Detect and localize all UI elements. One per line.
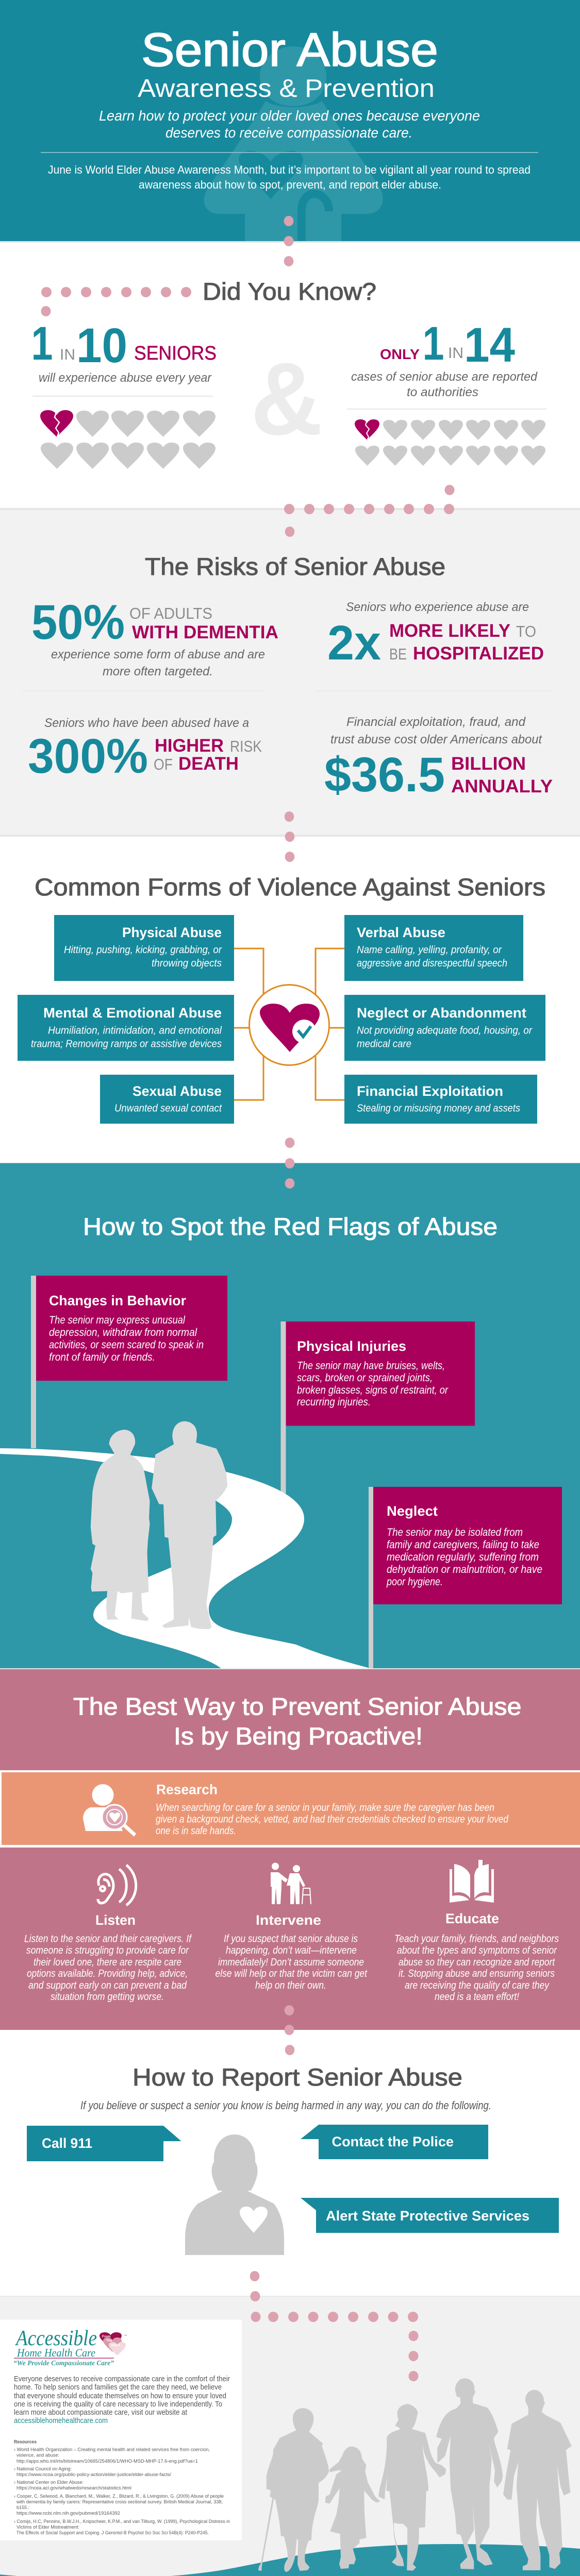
mother xyxy=(378,2404,446,2571)
closing paragraph: home. To help seniors and families get the care they need, we believe xyxy=(14,2383,222,2392)
flag: changes in behavior: The senior may express unusual xyxy=(49,1314,186,1326)
logo: accessible home health care: Home Health Care xyxy=(16,2346,95,2359)
box: mental and emotional abuse: trauma; Removing ramps or assistive devices xyxy=(31,1039,222,1050)
panel: common forms of violence xyxy=(0,835,580,1163)
logo hearts: Heart xyxy=(111,2344,120,2347)
flag: physical injuries: The senior may have bruises, welts, xyxy=(297,1360,445,1371)
stat: only 1 in 14: 1 xyxy=(423,317,444,370)
awareness month text: June is World Elder Abuse Awareness Month, but it’s important to be vigilant all year round to spread xyxy=(48,163,531,176)
column: intervene: If you suspect that senior abuse is xyxy=(224,1933,358,1944)
column: intervene: immediately! Don’t assume someone xyxy=(218,1957,364,1968)
stat: 300 percent: HIGHER xyxy=(155,736,224,756)
stat: only 1 in 14: ONLY xyxy=(380,346,420,362)
column: educate: abuse so they can recognize and report xyxy=(399,1957,555,1968)
stat: 2x: BE xyxy=(389,645,407,663)
stat: 50 percent: 50% xyxy=(31,595,125,650)
logo hearts: From xyxy=(102,2335,110,2338)
resources list: Resources xyxy=(14,2439,37,2445)
flag: neglect: poor hygiene. xyxy=(386,1576,443,1588)
callout: call 911: Call 911 xyxy=(42,2136,92,2151)
ground curve xyxy=(0,2544,580,2576)
flag: neglect: dehydration or malnutrition, or have xyxy=(387,1564,542,1575)
stat: 2x: MORE LIKELY xyxy=(389,621,510,641)
stat: only 1 in 14 xyxy=(351,317,538,399)
resources list: b155.: xyxy=(16,2505,29,2511)
box: verbal abuse xyxy=(344,915,523,981)
panel: did you know xyxy=(0,243,580,509)
panel: footer xyxy=(0,2296,580,2576)
silhouettes: family walking xyxy=(258,2378,572,2572)
box: physical abuse: Hitting, pushing, kicking, grabbing, or xyxy=(64,944,222,956)
box: neglect or abandonment: Not providing adequate food, housing, or xyxy=(357,1025,533,1037)
flag: changes in behavior xyxy=(36,1276,227,1381)
closing paragraph: Everyone deserves to receive compassionate care in the comfort of their xyxy=(14,2375,230,2383)
flag: changes in behavior: activities, or seem scared to speak in xyxy=(49,1339,204,1351)
stat: 300 percent xyxy=(28,716,262,784)
column: educate: need is a team effort! xyxy=(435,1991,519,2003)
resources list: http://apps.who.int/iris/bitstream/10665/254806/1/WHO-MSD-MHP-17.6-eng.pdf?ua=1 xyxy=(16,2459,198,2464)
stat: 50 percent: WITH DEMENTIA xyxy=(132,622,278,642)
flag: physical injuries: scars, broken or sprained joints, xyxy=(297,1372,433,1384)
heading: did you know: Did You Know? xyxy=(203,278,376,305)
intro tagline: deserves to receive compassionate care. xyxy=(165,125,412,141)
column: intervene: happening, don’t wait—intervene xyxy=(226,1945,357,1956)
girl xyxy=(325,2446,380,2569)
icon: ear xyxy=(98,1865,136,1905)
resources list: violence, and abuse: xyxy=(16,2452,59,2459)
box: sexual abuse: Unwanted sexual contact xyxy=(114,1103,222,1114)
stat: 36.5 billion: $36.5 xyxy=(324,748,445,802)
connector lines xyxy=(234,948,344,1100)
column: educate xyxy=(394,1860,559,2003)
flag: physical injuries xyxy=(286,1321,475,1426)
column: listen: Listen xyxy=(95,1912,136,1928)
flag: neglect: medication regularly, suffering from xyxy=(387,1551,539,1563)
resources list: › National Center on Elder Abuse: xyxy=(14,2480,84,2485)
box: sexual abuse: Sexual Abuse xyxy=(132,1083,222,1099)
white info card xyxy=(0,2319,242,2540)
stat: 36.5 billion: ANNUALLY xyxy=(451,776,553,796)
stat: 36.5 billion: trust abuse cost older Americans about xyxy=(330,733,542,747)
box: sexual abuse xyxy=(100,1075,234,1124)
stat: 2x: HOSPITALIZED xyxy=(413,643,544,664)
hearts: 1 of 10 broken xyxy=(40,410,216,469)
stat: 2x: 2x xyxy=(327,616,381,670)
grandfather xyxy=(503,2390,572,2570)
box: financial exploitation: Financial Exploitation xyxy=(357,1083,503,1099)
icon: broken heart xyxy=(40,410,73,438)
flag: changes in behavior: depression, withdraw from normal xyxy=(49,1327,197,1338)
resources list: with dementia by family carers: Representative cross sectional survey. British Medical Journal, 338, xyxy=(16,2499,223,2505)
band: research: one is in safe hands. xyxy=(156,1825,236,1837)
stat: 2x: TO xyxy=(516,622,536,640)
column: educate: it. Stopping abuse and ensuring seniors xyxy=(399,1968,555,1979)
icon: broken heart small xyxy=(355,419,379,440)
box: financial exploitation: Stealing or misusing money and assets xyxy=(357,1103,520,1114)
heading: be proactive xyxy=(73,1693,521,1750)
resources list xyxy=(14,2439,230,2536)
title: Senior Abuse xyxy=(141,24,438,76)
flag: neglect: The senior may be isolated from xyxy=(387,1527,523,1538)
stat: 1 in 10 seniors xyxy=(31,317,217,385)
stat: only 1 in 14: to authorities xyxy=(407,385,478,399)
intro tagline: Learn how to protect your older loved ones because everyone xyxy=(99,108,480,124)
flag: neglect: family and caregivers, failing to take xyxy=(387,1539,539,1551)
callout: contact the police: Contact the Police xyxy=(332,2134,454,2149)
box: mental and emotional abuse: Humiliation, intimidation, and emotional xyxy=(48,1025,222,1037)
flag: physical injuries: Physical Injuries xyxy=(297,1338,406,1354)
closing paragraph: accessiblehomehealthcare.com xyxy=(14,2416,108,2425)
ampersand: & xyxy=(251,342,323,456)
callout: alert state protective services xyxy=(301,2198,559,2233)
column: listen: Listen to the senior and their caregivers. If xyxy=(24,1933,192,1944)
silhouette: person with heart xyxy=(185,2134,284,2255)
column: listen: situation from getting worse. xyxy=(51,1991,164,2003)
box: neglect or abandonment: Neglect or Abandonment xyxy=(357,1005,526,1021)
dotted path connecting sections xyxy=(41,216,455,2381)
stat: 36.5 billion xyxy=(324,715,553,802)
resources list: › World Health Organization – Creating mental health and related services free from coercion, xyxy=(14,2447,210,2452)
icon: two people with walker xyxy=(271,1863,311,1904)
box: neglect or abandonment: medical care xyxy=(357,1039,411,1050)
column: listen: their loved one, there are respite care xyxy=(34,1957,181,1968)
hearts: 1 of 14 broken xyxy=(355,419,545,466)
box: verbal abuse: aggressive and disrespectful speech xyxy=(357,958,507,969)
awareness month text: awareness about how to spot, prevent, and report elder abuse. xyxy=(139,178,441,191)
column: educate: Teach your family, friends, and neighbors xyxy=(394,1933,559,1944)
icon: open book xyxy=(450,1860,494,1903)
stat: only 1 in 14: 14 xyxy=(464,318,515,372)
flag: neglect: Neglect xyxy=(387,1503,438,1519)
box: verbal abuse: Verbal Abuse xyxy=(357,925,445,940)
heading: be proactive: The Best Way to Prevent Senior Abuse xyxy=(73,1693,521,1720)
closing paragraph: learn more about compassionate care, visit our website at xyxy=(14,2408,188,2417)
panel: risks of senior abuse xyxy=(0,508,580,836)
stat: 300 percent: RISK xyxy=(230,737,262,755)
grandmother with cane xyxy=(258,2408,329,2572)
awareness month text xyxy=(48,163,531,191)
stat: 50 percent: more often targeted. xyxy=(103,665,213,679)
band: research: Research xyxy=(156,1782,218,1797)
box: verbal abuse: Name calling, yelling, profanity, or xyxy=(357,944,502,956)
box: physical abuse: Physical Abuse xyxy=(122,925,222,940)
father xyxy=(436,2378,503,2569)
box: neglect or abandonment xyxy=(344,995,545,1061)
panel: how to report senior abuse xyxy=(0,2030,580,2296)
logo: accessible home health care: Accessible xyxy=(14,2327,97,2350)
column: educate: Educate xyxy=(445,1911,499,1926)
box: mental and emotional abuse: Mental & Emotional Abuse xyxy=(43,1005,222,1021)
resources list: › National Council on Aging: xyxy=(14,2466,72,2472)
callout: contact the police xyxy=(301,2125,488,2159)
flag poles xyxy=(31,1276,286,1494)
resources list: › Comijs, H.C, Penninx, B.W.J.H., Knipscheer, K.P.M., and van Tilburg, W. (1999), Psychological Distress in xyxy=(14,2519,230,2524)
heading: risks: The Risks of Senior Abuse xyxy=(145,553,445,580)
band: research: When searching for care for a senior in your family, make sure the caregiver has been xyxy=(156,1802,494,1814)
panel: red flags of abuse xyxy=(0,1163,580,1669)
resources list: The Effects of Social Support and Coping. J Gerontol B Psychol Sci Soc Sci 54B(4): P240-P245. xyxy=(16,2530,209,2536)
stat: 2x xyxy=(327,600,544,670)
stat: only 1 in 14: IN xyxy=(448,345,463,362)
closing paragraph: that everyone should educate themselves on how to ensure your loved xyxy=(14,2392,226,2400)
column: listen xyxy=(24,1865,192,2003)
heading: red flags: How to Spot the Red Flags of Abuse xyxy=(83,1213,498,1240)
central heart emblem xyxy=(250,985,329,1065)
flag: physical injuries: broken glasses, signs of restraint, or xyxy=(297,1384,449,1396)
heading: report: How to Report Senior Abuse xyxy=(132,2063,462,2091)
subtitle: Awareness & Prevention xyxy=(138,75,435,103)
stat: 1 in 10 seniors: IN xyxy=(60,346,75,363)
resources list: › Cooper, C, Selwood, A, Blanchard, M., Walker, Z., Blizard, R., & Livingston, G. (2009) Abuse of people xyxy=(14,2494,224,2499)
flag: neglect xyxy=(369,1487,562,1669)
heading: be proactive: Is by Being Proactive! xyxy=(174,1722,423,1750)
logo hearts: The xyxy=(106,2339,112,2343)
closing paragraph xyxy=(14,2375,230,2425)
column: educate: about the types and symptoms of senior xyxy=(397,1945,557,1956)
flag: changes in behavior: front of family or friends. xyxy=(49,1351,155,1363)
closing paragraph: one is receiving the quality of care necessary to live independently. To xyxy=(14,2400,222,2409)
column: listen: someone is struggling to provide care for xyxy=(26,1945,189,1956)
heading: common forms: Common Forms of Violence Against Seniors xyxy=(35,873,545,901)
column: intervene: Intervene xyxy=(256,1912,321,1928)
resources list: https://ncea.acl.gov/whatwedo/research/statistics.html xyxy=(16,2485,131,2491)
stat: 36.5 billion: BILLION xyxy=(451,754,526,774)
box: physical abuse xyxy=(54,915,234,981)
logo: accessible home health care: “We Provide Compassionate Care” xyxy=(13,2360,114,2367)
stat: 50 percent xyxy=(31,595,278,679)
logo hearts xyxy=(100,2332,127,2355)
stat: 300 percent: DEATH xyxy=(178,754,239,774)
stat: 1 in 10 seniors: 1 xyxy=(31,317,53,370)
column: intervene xyxy=(216,1863,368,1991)
silhouettes: senior couple on road xyxy=(91,1421,227,1629)
stat: 300 percent: Seniors who have been abused have a xyxy=(44,716,249,730)
logo: accessible home health care xyxy=(13,2327,127,2367)
callout: call 911 xyxy=(27,2126,181,2161)
stat: only 1 in 14: cases of senior abuse are reported xyxy=(351,370,538,384)
resources list: https://www.ncbi.nlm.nih.gov/pubmed/19164392 xyxy=(16,2511,120,2516)
box: physical abuse: throwing objects xyxy=(152,958,222,969)
stat: 300 percent: OF xyxy=(154,755,173,773)
stat: 1 in 10 seniors: will experience abuse every year xyxy=(39,371,212,385)
band: research xyxy=(0,1770,580,1848)
panel: prevent senior abuse xyxy=(0,1668,580,2030)
stat: 1 in 10 seniors: SENIORS xyxy=(134,343,217,364)
column: educate: are receiving the quality of care they xyxy=(405,1980,550,1991)
stat: 300 percent: 300% xyxy=(28,729,148,784)
report intro text: If you believe or suspect a senior you know is being harmed in any way, you can do the following. xyxy=(80,2099,491,2112)
panel: header xyxy=(0,0,580,243)
column: intervene: else will help or that the victim can get xyxy=(216,1968,368,1979)
resources list: Victims of Elder Mistreatment: xyxy=(16,2524,79,2530)
stat: 50 percent: OF ADULTS xyxy=(129,604,212,622)
band: research: given a background check, vetted, and had their credentials checked to ensure your loved xyxy=(156,1814,509,1825)
stat: 36.5 billion: Financial exploitation, fraud, and xyxy=(346,715,526,729)
winding road xyxy=(0,1448,372,1669)
stat: 2x: Seniors who experience abuse are xyxy=(346,600,529,614)
box: financial exploitation xyxy=(344,1075,537,1124)
flag: changes in behavior: Changes in Behavior xyxy=(49,1293,186,1309)
stat: 50 percent: experience some form of abuse and are xyxy=(51,648,265,662)
callout: alert state protective services: Alert State Protective Services xyxy=(326,2208,529,2224)
column: intervene: help on their own. xyxy=(255,1980,326,1991)
intro tagline xyxy=(99,108,480,141)
column: listen: options available. Providing help, advice, xyxy=(27,1968,188,1979)
stat: 1 in 10 seniors: 10 xyxy=(76,318,127,373)
column: listen: and support early on can prevent a bad xyxy=(28,1980,187,1991)
icon: person with magnifier xyxy=(83,1784,135,1835)
resources list: https://www.ncoa.org/public-policy-action/elder-justice/elder-abuse-facts/ xyxy=(16,2472,171,2478)
box: mental and emotional abuse xyxy=(18,995,234,1061)
flag: physical injuries: recurring injuries. xyxy=(297,1396,371,1408)
background senior silhouette xyxy=(204,46,383,241)
logo hearts: TM xyxy=(124,2334,127,2336)
